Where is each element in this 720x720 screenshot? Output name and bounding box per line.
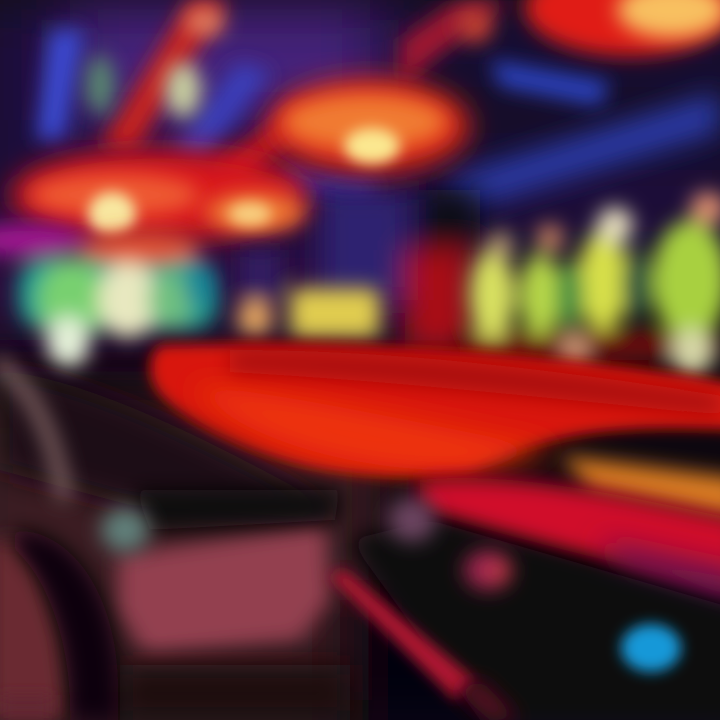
dark console bbox=[350, 520, 720, 720]
lamp: centre bbox=[270, 78, 470, 174]
orange and crimson lower band bbox=[420, 455, 720, 610]
console lights bbox=[388, 498, 512, 590]
red lamp stems bbox=[100, 0, 510, 185]
dark bar shadow bbox=[0, 370, 340, 520]
green ceiling glints bbox=[86, 7, 493, 118]
yellow centre panel bbox=[237, 250, 380, 338]
red counter bar bbox=[150, 344, 720, 475]
pale button bbox=[101, 508, 149, 552]
slot machines left: teal and green bbox=[0, 224, 218, 368]
seat: black backrest top bbox=[135, 490, 340, 530]
lamp: left bbox=[10, 149, 310, 241]
green figures on right bbox=[460, 192, 720, 376]
left chair panel bbox=[0, 540, 70, 720]
central pillar bbox=[320, 190, 480, 350]
blue ceiling streaks bbox=[36, 30, 610, 205]
left curved rail bbox=[0, 360, 65, 500]
blue console light bbox=[621, 624, 681, 672]
blue diagonal ceiling band bbox=[445, 92, 720, 212]
seat: bottom shade bbox=[120, 665, 350, 720]
red console strip end bbox=[455, 680, 520, 720]
left chair dark arm bbox=[15, 530, 118, 720]
red console strip bbox=[328, 570, 475, 700]
upper wall glow bbox=[0, 0, 720, 340]
lower floor tones bbox=[0, 378, 449, 720]
left chair panel base bbox=[0, 714, 50, 720]
background bbox=[0, 316, 720, 498]
seat: pink cushion bbox=[118, 525, 330, 655]
lamp: top right bbox=[525, 0, 720, 56]
